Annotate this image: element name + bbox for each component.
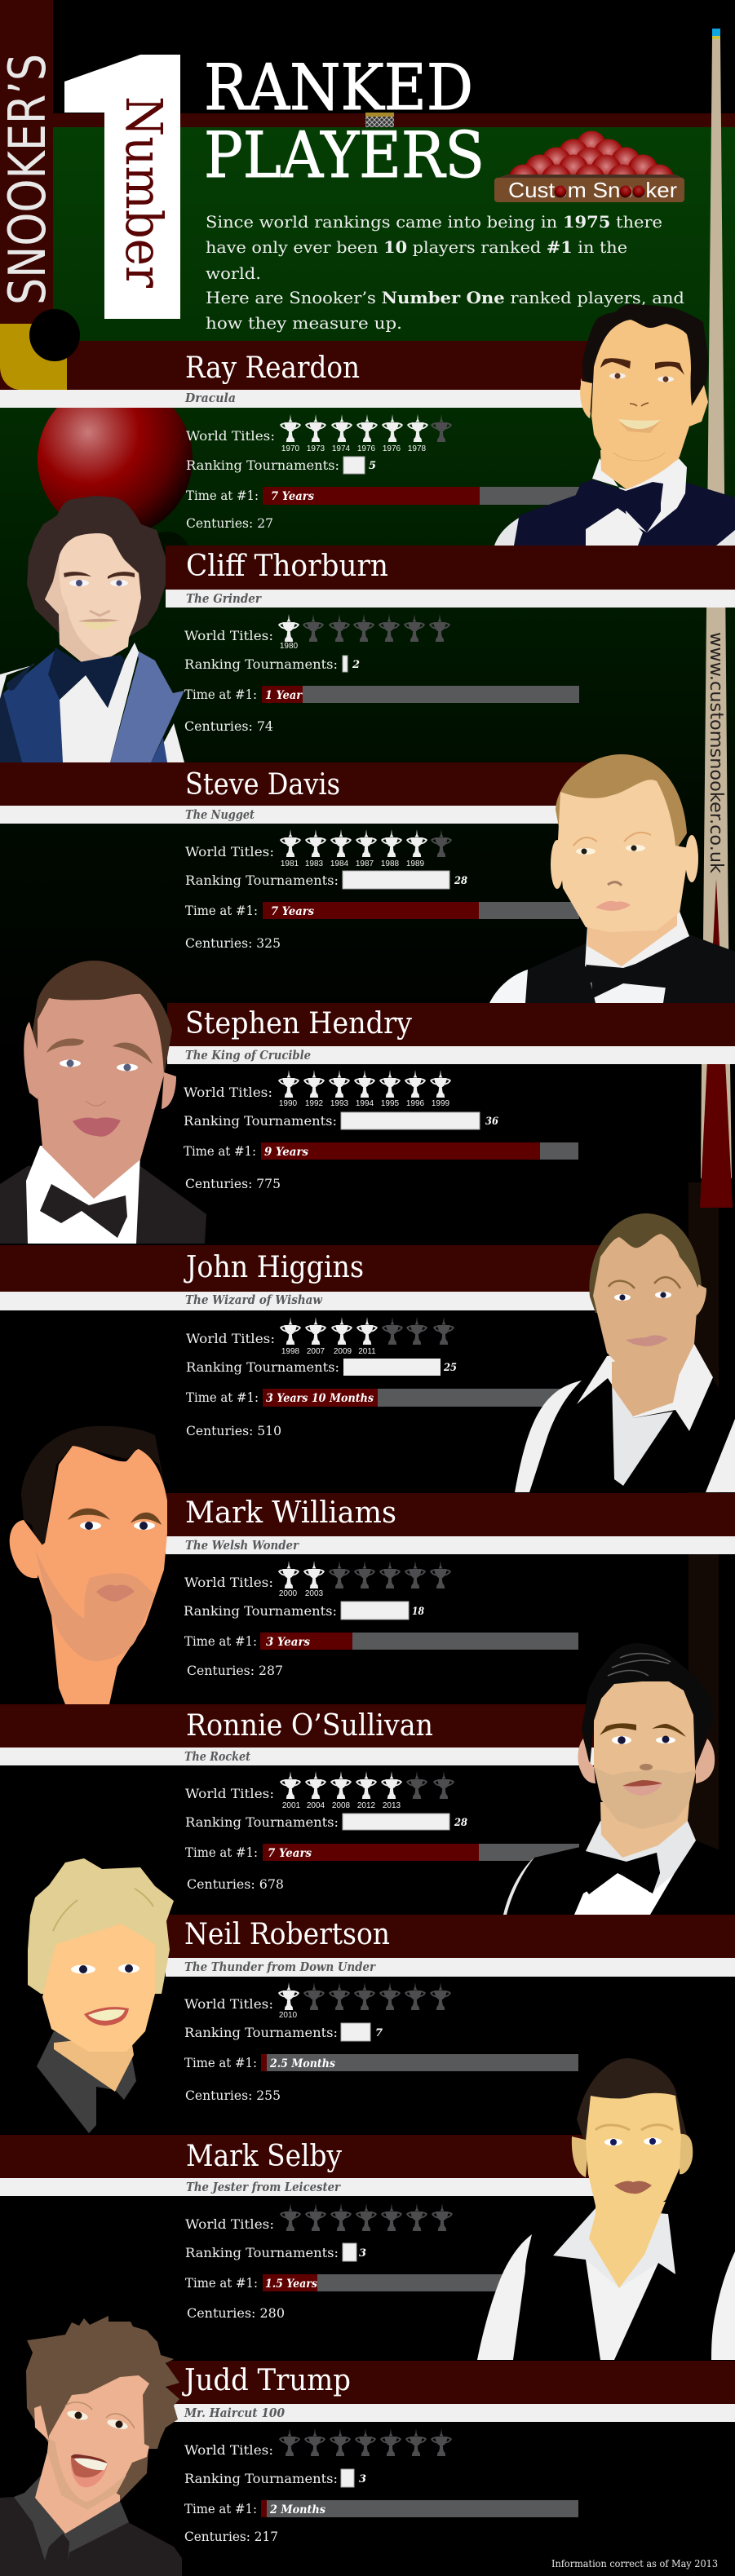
stat: time at number one (184, 1142, 578, 1160)
stat: world titles: 1988 (381, 859, 400, 868)
stat: world titles: 1970 (281, 444, 300, 453)
stat: world titles: 1981 (281, 859, 299, 868)
stat: time at number one: Time at #1: (185, 903, 258, 918)
stat: time at number one: 7 Years (271, 490, 314, 503)
stat: world titles: World Titles: (185, 844, 274, 859)
name band (167, 1003, 735, 1046)
stat: world titles: 1989 (406, 859, 425, 868)
stat: time at number one: Time at #1: (184, 687, 257, 702)
text block: introduction: Since world rankings came into being in 1975 there (206, 212, 662, 232)
nickname band (167, 1046, 735, 1064)
player name: Mark Selby (186, 2140, 343, 2173)
player name: Cliff Thorburn (186, 550, 388, 583)
stat: centuries: Centuries: 27 (186, 515, 273, 531)
stat: world titles: 1984 (330, 859, 349, 868)
nickname: The Rocket (184, 1749, 250, 1764)
panel: Neil Robertson (28, 1858, 735, 2133)
panel: Ronnie O'Sullivan (0, 1643, 735, 1915)
nickname: The Thunder from Down Under (184, 1960, 376, 1974)
stat: world titles: 1990 (279, 1099, 298, 1108)
portrait: Judd Trump (0, 2316, 182, 2576)
stat: world titles: 1974 (332, 444, 351, 453)
stat: world titles (185, 1771, 454, 1810)
stat: ranking tournaments: Ranking Tournaments: (184, 1603, 337, 1619)
icon: black ball behind (144, 532, 190, 577)
stat: world titles: 1978 (408, 444, 427, 453)
icon: big red ball (38, 382, 193, 537)
stat: centuries: Centuries: 280 (187, 2305, 285, 2321)
player name: Stephen Hendry (185, 1007, 413, 1041)
panel: Mark Williams (10, 1426, 735, 1704)
player name: Ray Reardon (185, 351, 360, 385)
nickname band (0, 2178, 620, 2196)
stat: ranking tournaments (185, 1814, 467, 1830)
stat: time at number one: 2 Months (269, 2503, 325, 2516)
stat: world titles (184, 1982, 451, 2020)
name band (0, 762, 620, 806)
stat: ranking tournaments: Ranking Tournaments: (186, 1359, 339, 1375)
nickname band (0, 806, 620, 824)
player name: Ronnie O’Sullivan (186, 1709, 433, 1743)
logo: Custom Snooker rack: Custom Snooker (508, 178, 677, 202)
heading: Players: PLAYERS (204, 119, 485, 192)
nickname: The Welsh Wonder (185, 1538, 299, 1553)
stat: time at number one (186, 1389, 579, 1407)
stat: world titles: 1976 (383, 444, 401, 453)
portrait: John Higgins (515, 1213, 735, 1492)
stat: world titles: World Titles: (186, 1331, 275, 1346)
portrait: Neil Robertson (28, 1858, 174, 2133)
nickname: The Jester from Leicester (186, 2180, 341, 2194)
name band (166, 1915, 735, 1958)
stat: centuries: Centuries: 325 (185, 935, 281, 951)
stat: ranking tournaments: 3 (359, 2247, 366, 2260)
panel: Judd Trump (0, 2316, 735, 2576)
portrait: Steve Davis (489, 754, 735, 1003)
stat: ranking tournaments (185, 871, 467, 889)
stat: world titles: 1976 (357, 444, 376, 453)
nickname band (166, 1958, 735, 1977)
stat: world titles: 2010 (279, 2011, 298, 2020)
stat: world titles: 1980 (280, 642, 299, 651)
stat: world titles: 1999 (432, 1099, 450, 1108)
stat: ranking tournaments: 28 (454, 1817, 467, 1829)
stat: time at number one: Time at #1: (186, 1390, 259, 1405)
heading: Number: Number (114, 96, 174, 288)
stat: ranking tournaments: Ranking Tournaments: (185, 2245, 339, 2260)
stat: world titles: 1995 (381, 1099, 400, 1108)
stat: time at number one (185, 2274, 579, 2291)
stat: ranking tournaments: 25 (443, 1362, 457, 1374)
stat: ranking tournaments: Ranking Tournaments: (184, 2025, 338, 2040)
icon: corner pocket (0, 309, 80, 390)
portrait: Stephen Hendry (0, 961, 206, 1244)
text block: introduction: Here are Snooker’s Number One ranked players, and (206, 288, 684, 307)
stat: time at number one: Time at #1: (184, 2501, 257, 2516)
nickname band (0, 390, 620, 408)
stat: time at number one: 7 Years (271, 905, 314, 918)
stat: ranking tournaments: Ranking Tournaments: (184, 656, 338, 672)
name band (0, 2135, 620, 2178)
stat: world titles: World Titles: (184, 1996, 273, 2012)
stat: ranking tournaments (184, 1112, 498, 1129)
stat: world titles: 1987 (356, 859, 374, 868)
text block: introduction: world. (206, 263, 261, 283)
stat: world titles: 1994 (356, 1099, 374, 1108)
stat: world titles (184, 1561, 451, 1598)
stat: ranking tournaments: Ranking Tournaments: (185, 1814, 339, 1830)
nickname: The Grinder (186, 591, 262, 606)
stat: ranking tournaments: Ranking Tournaments: (184, 2471, 338, 2486)
stat: world titles: World Titles: (186, 428, 275, 444)
stat: world titles: 1993 (330, 1099, 349, 1108)
stat: time at number one: 1.5 Years (265, 2278, 317, 2291)
stat: world titles: 2011 (358, 1347, 376, 1356)
portrait: Ray Reardon (494, 304, 735, 546)
portrait: Ronnie O'Sullivan (503, 1643, 735, 1915)
name band (0, 1704, 620, 1748)
stat: time at number one (184, 1633, 578, 1650)
stat: time at number one (184, 2054, 578, 2071)
stat: world titles: 1996 (406, 1099, 425, 1108)
stat: ranking tournaments: 2 (352, 659, 360, 671)
icon: snooker cue (700, 29, 733, 1208)
stat: time at number one: Time at #1: (185, 2275, 258, 2291)
stat: ranking tournaments: 3 (359, 2473, 366, 2485)
stat: time at number one: Time at #1: (184, 2055, 257, 2070)
nickname: The King of Crucible (185, 1048, 311, 1063)
stat: centuries: Centuries: 775 (185, 1176, 281, 1191)
nickname band (0, 1748, 620, 1765)
stat: world titles: 2007 (307, 1347, 325, 1356)
stat: world titles: 2012 (357, 1801, 376, 1810)
stat: time at number one: Time at #1: (184, 1143, 256, 1159)
stat: world titles: 2003 (305, 1589, 324, 1598)
nickname band (166, 1536, 735, 1554)
stat: time at number one (185, 902, 579, 919)
stat: world titles: 1992 (305, 1099, 324, 1108)
stat: time at number one: 3 Years 10 Months (266, 1392, 374, 1405)
stat: time at number one: Time at #1: (186, 488, 259, 503)
portrait: Mark Williams (10, 1426, 167, 1704)
stat: world titles (185, 2203, 453, 2232)
nickname band (0, 1292, 620, 1310)
panel: Ray Reardon (0, 304, 735, 577)
stat: world titles (184, 2428, 452, 2458)
stat: world titles: 1983 (305, 859, 324, 868)
icon: pocket net (365, 113, 394, 127)
stat: world titles: World Titles: (184, 1085, 272, 1100)
stat: world titles: 2000 (279, 1589, 298, 1598)
stat: world titles: World Titles: (184, 628, 273, 643)
nickname band (166, 590, 735, 608)
stat: time at number one: 1 Year (265, 689, 303, 702)
stat: ranking tournaments: 5 (369, 460, 376, 472)
panel: Stephen Hendry (0, 961, 735, 1244)
stat: world titles (186, 414, 452, 453)
stat: ranking tournaments (186, 1359, 457, 1376)
name band (166, 546, 735, 590)
player name: Mark Williams (185, 1496, 396, 1530)
stat: ranking tournaments: 7 (375, 2027, 383, 2039)
stat: ranking tournaments (184, 2023, 383, 2041)
stat: world titles (186, 1317, 454, 1356)
nickname: The Nugget (185, 807, 255, 822)
nickname: The Wizard of Wishaw (185, 1292, 323, 1307)
name band (166, 1493, 735, 1536)
portrait: Mark Selby (477, 2058, 735, 2360)
stat: ranking tournaments: Ranking Tournaments: (186, 457, 339, 473)
stat: world titles: 2013 (383, 1801, 401, 1810)
stat: time at number one: 7 Years (268, 1847, 312, 1860)
panel: Mark Selby (0, 2058, 735, 2360)
stat: world titles: World Titles: (185, 2216, 274, 2232)
stat: centuries: Centuries: 217 (184, 2529, 278, 2544)
name band (0, 341, 620, 390)
player name: Judd Trump (181, 2364, 351, 2397)
stat: centuries: Centuries: 74 (184, 718, 273, 734)
logo: Custom Snooker rack (494, 130, 684, 202)
stat: world titles: World Titles: (185, 1786, 274, 1801)
stat: time at number one: Time at #1: (185, 1845, 258, 1860)
stat: world titles: 1998 (281, 1347, 300, 1356)
stat: time at number one (184, 686, 579, 703)
footnote: Information correct as of May 2013 (551, 2558, 718, 2569)
stat: time at number one: Time at #1: (184, 1633, 257, 1649)
text block: introduction: how they measure up. (206, 313, 402, 333)
panel: Steve Davis (0, 754, 735, 1003)
nickname band (167, 2404, 735, 2422)
stat: time at number one: 2.5 Months (269, 2057, 335, 2070)
stat: ranking tournaments: 28 (454, 875, 467, 887)
website url on the cue: www.customsnooker.co.uk (706, 632, 726, 873)
name band (167, 2361, 735, 2404)
stat: world titles: World Titles: (184, 1575, 273, 1590)
stat: world titles (185, 829, 452, 868)
icon: large number one (64, 55, 180, 319)
panel: John Higgins (0, 1213, 735, 1492)
stat: centuries: Centuries: 287 (187, 1663, 283, 1678)
stat: time at number one: 9 Years (264, 1146, 308, 1159)
stat: world titles: 2004 (307, 1801, 325, 1810)
stat: ranking tournaments: Ranking Tournaments: (184, 1113, 337, 1129)
nickname: Dracula (184, 391, 236, 405)
stat: time at number one: 3 Years (266, 1636, 310, 1649)
portrait: Cliff Thorburn (0, 496, 184, 762)
stat: world titles (184, 1070, 451, 1108)
stat: world titles (184, 614, 450, 651)
stat: time at number one (186, 487, 580, 505)
stat: world titles: 2008 (332, 1801, 351, 1810)
stat: centuries: Centuries: 255 (185, 2088, 281, 2103)
player name: Steve Davis (185, 768, 340, 802)
stat: centuries: Centuries: 510 (186, 1423, 281, 1438)
panel: dark cue bridge block (689, 1182, 719, 1849)
stat: time at number one (185, 1844, 579, 1861)
panel: vertical title column (0, 0, 57, 324)
player name: John Higgins (183, 1251, 364, 1284)
text block: introduction: have only ever been 10 players ranked #1 in the (206, 237, 627, 257)
stat: centuries: Centuries: 678 (187, 1876, 284, 1892)
panel: Cliff Thorburn (0, 496, 735, 762)
stat: world titles: 1973 (307, 444, 325, 453)
stat: world titles: World Titles: (184, 2442, 273, 2458)
stat: ranking tournaments: Ranking Tournaments: (185, 873, 339, 888)
player name: Neil Robertson (184, 1918, 390, 1951)
stat: world titles: 2009 (334, 1347, 352, 1356)
stat: ranking tournaments: 36 (485, 1116, 498, 1128)
name band (0, 1245, 620, 1292)
stat: world titles: 2001 (282, 1801, 301, 1810)
stat: time at number one (184, 2500, 578, 2517)
text block: introduction (206, 212, 684, 333)
stat: ranking tournaments: 18 (412, 1606, 424, 1618)
nickname: Mr. Haircut 100 (184, 2406, 286, 2420)
stat: ranking tournaments (184, 1602, 424, 1619)
heading: Ranked: RANKED (204, 51, 473, 125)
